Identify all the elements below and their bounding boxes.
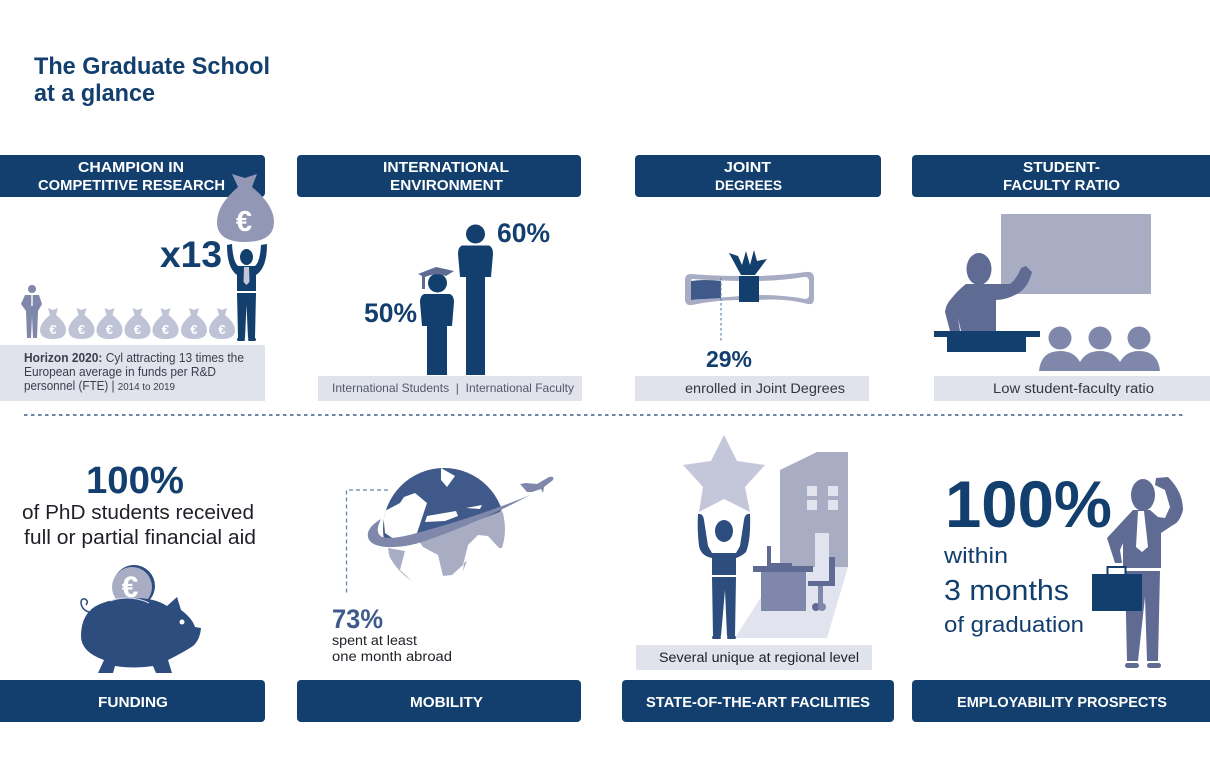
panel: funding [0,460,265,722]
caption: enrolled: enrolled in Joint Degrees [685,381,845,396]
icon: airplane [520,477,554,493]
icon: row of small money bags [40,308,235,339]
header: facilities [622,680,894,722]
text: spent abroad: spent at least [332,633,417,648]
caption: several unique: Several unique at regional level [659,650,859,665]
leader line [720,278,722,341]
stat: 73%: 73% [332,604,383,634]
header: mobility [297,680,581,722]
icon: globe [383,468,506,582]
caption: horizon 2020: personnel (FTE) | 2014 to 2019 [24,379,175,393]
caption: horizon 2020 [0,345,265,401]
icon: large money bag [217,174,274,242]
panel: champion in competitive research [0,155,274,401]
header: champion in competitive research [0,155,265,197]
icon: large money bag: € [236,206,252,238]
header: employability: EMPLOYABILITY PROSPECTS [957,695,1167,711]
stat: 29%: 29% [706,346,752,372]
header: joint degrees: DEGREES [715,177,782,193]
icon: desk and chair [753,546,835,611]
text: within 3 months: 3 months [944,575,1069,607]
icon: diploma scroll [685,250,814,305]
icon: row of small money bags: € [190,322,198,337]
panel: joint degrees [635,155,881,401]
icon: row of small money bags: € [162,322,169,337]
text: financial aid [22,502,256,549]
title [34,53,270,107]
icon: row of small money bags: € [218,322,226,337]
caption: low ratio [934,376,1210,401]
header: joint degrees: JOINT [724,159,771,176]
caption: horizon 2020: European average in funds per R&D [24,365,216,379]
icon: students [1039,326,1160,371]
caption: low ratio: Low student-faculty ratio [993,381,1154,396]
icon: row of small money bags: € [106,322,113,337]
header: joint degrees [635,155,881,197]
header: international environment: INTERNATIONAL [383,160,509,176]
icon: flight arc [368,495,530,547]
caption: horizon 2020: Horizon 2020: Cyl attracting 13 times the [24,351,244,365]
stat: 100% employability: 100% [945,467,1112,541]
text: spent abroad: one month abroad [332,649,452,664]
text: within 3 months: within [943,543,1008,568]
text: within 3 months [943,543,1084,637]
icon: row of small money bags: € [49,322,57,337]
multiplier x13: x13 [160,234,222,275]
panel: employability [912,467,1210,722]
panel: facilities [622,435,894,722]
header: international environment [297,155,581,197]
header: student-faculty ratio: STUDENT- [1023,160,1100,176]
stat: 60%: 60% [497,218,550,248]
icon: floor [735,567,848,638]
text: spent abroad [332,633,452,664]
icon: man lifting bag [227,244,267,341]
leader line [346,490,388,594]
header: funding [0,680,265,722]
panel: international environment [297,155,582,401]
caption: international legend: International Students | International Faculty [332,381,574,395]
stat: 100% funding: 100% [86,460,184,502]
icon: man with briefcase [1092,477,1183,668]
stat: 50%: 50% [364,298,417,328]
icon: person lifting star [698,514,750,639]
header: facilities: STATE-OF-THE-ART FACILITIES [646,695,870,711]
icon: row of small money bags: € [78,322,85,337]
panel: mobility [297,468,581,722]
text: financial aid: full or partial financial aid [24,527,256,549]
icon: piggy bank: € [122,571,139,604]
icon: desk [934,331,1040,352]
icon: faculty member [458,224,493,375]
header: champion in competitive research: CHAMPION IN [78,160,184,176]
icon: building [780,452,848,567]
caption: enrolled [635,376,869,401]
icon: row of small money bags: € [134,322,141,337]
icon: teacher [945,253,1032,331]
icon: student with cap [418,267,454,375]
caption: several unique [636,645,872,670]
icon: star [683,435,765,512]
header: mobility: MOBILITY [410,695,483,711]
header: international environment: ENVIRONMENT [390,178,503,194]
icon: piggy bank [81,565,201,673]
header: student-faculty ratio [912,155,1210,197]
icon: small man [21,285,42,338]
text: within 3 months: of graduation [944,612,1084,637]
title: The Graduate School [34,53,270,80]
panel: student-faculty ratio [912,155,1210,401]
header: student-faculty ratio: FACULTY RATIO [1003,178,1120,194]
header: employability [912,680,1210,722]
caption: international legend [318,376,582,401]
text: financial aid: of PhD students received [22,502,254,524]
title: at a glance [34,80,155,107]
icon: board [1001,214,1151,294]
header: champion in competitive research: COMPETITIVE RESEARCH [38,178,225,194]
header: funding: FUNDING [98,695,168,711]
